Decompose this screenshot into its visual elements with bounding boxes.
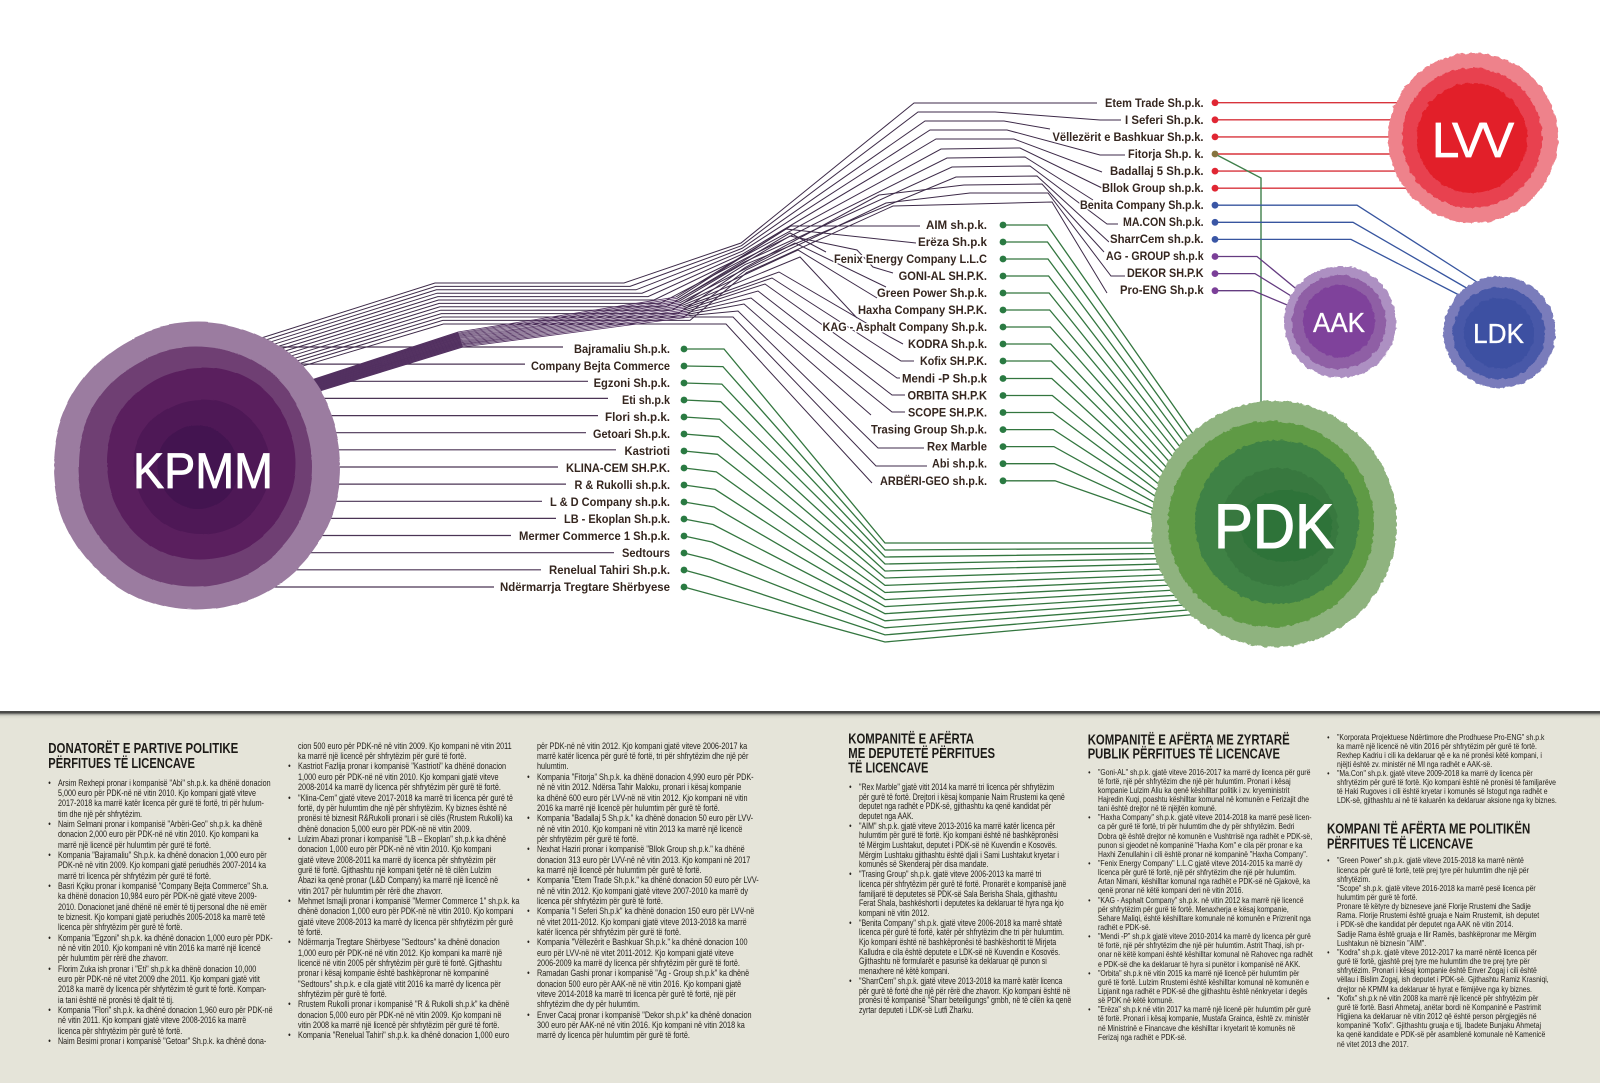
text column: companies linked to politics: gurë të fortë, gjashtë prej tyre me hulumtim dhe tre prej tyre për: [1337, 956, 1530, 966]
text column: companies linked to public officials: onar në këtë kompani është këshilltar komunal në Rahovec nga radhët: [1098, 949, 1313, 959]
heading: donors: [48, 740, 239, 772]
company labels: top group: Etem Trade Sh.p.k.: [1105, 96, 1204, 110]
text column: companies linked to MPs: "Rex Marble" gjatë vitit 2014 ka marrë tri licenca për shfrytëzim: [859, 782, 1054, 792]
company labels: middle group: Abi sh.p.k.: [932, 457, 987, 471]
company labels: left group: Eti sh.p.k: [622, 393, 670, 407]
connectors: middle companies to PDK: [1003, 225, 1194, 516]
text column: companies linked to public officials: punon si gjeodet në kompaninë "Haxha Kom" e cila për pronar e ka: [1098, 840, 1303, 850]
circle: KPMM: [53, 322, 341, 610]
text column: companies linked to public officials: kompanie Lulzim Aliu ka qenë këshilltar politik i zv. kryeministrit: [1098, 785, 1290, 795]
connectors: KPMM to party-linked top companies: [255, 103, 1125, 483]
heading: companies linked to MPs: KOMPANITË E AFËRTA: [848, 730, 974, 748]
company labels: top group: SharrCem sh.p.k.: [1110, 232, 1204, 246]
text column: companies linked to public officials: Hajredin Kuqi, poashtu këshilltar komunal në komunën e Ferizajit dhe: [1098, 794, 1309, 804]
text column: companies linked to public officials: Artan Nimani, këshilltar komunal nga radhët e PDK-së në Gjakovë, ka: [1098, 876, 1310, 886]
text column: donors part 2: Rrustem Rukolli pronar i kompanisë "R & Rukolli sh.p.k" ka dhënë: [298, 999, 509, 1009]
text column: donors part 2: gjatë viteve 2008-2011 ka marrë dy licenca për shfrytëzim për: [298, 855, 496, 865]
company labels: left group: L & D Company sh.p.k.: [550, 495, 670, 509]
circle: LDK: [1444, 276, 1556, 388]
company labels: middle group: Kofix SH.P.K.: [920, 354, 987, 368]
text column: donors part 3: Kompania "I Seferi Sh.p.k" ka dhënë donacion 150 euro për LVV-në: [537, 906, 755, 916]
text column: donors part 1: në vitin 2011. Kjo kompani gjatë viteve 2008-2016 ka marrë: [58, 1015, 246, 1025]
text column: donors part 1: euro për PDK-në në vitet 2009 dhe 2011. Kjo kompani gjatë vitit: [58, 974, 260, 984]
text column: donors part 2: të fortë.: [298, 927, 322, 937]
text column: companies linked to politics: Sadije Rama është gruaja e Ilir Ramës, bashkëpronar me Mërgim: [1337, 929, 1537, 939]
text column: donors part 1: Kompania "Egzoni" sh.p.k. ka dhënë donacion 1,000 euro për PDK-: [58, 933, 273, 943]
text column: companies linked to politics: "Scope" sh.p.k. gjatë viteve 2016-2018 ka marrë pesë licenca për: [1337, 883, 1536, 893]
text column: donors part 2: pronësi të biznesit R&Rukolli pronari i së cilës (Rrustem Rukolli) ka: [298, 813, 512, 823]
company labels: top group: Vëllezërit e Bashkuar Sh.p.k.: [1052, 130, 1204, 144]
company labels: left group: Flori sh.p.k.: [605, 410, 670, 424]
text column: companies linked to MPs: pronësi të kompanisë "Sharr beteiligungs" gmbh, në të cilën ka qenë: [859, 995, 1072, 1005]
text column: donors part 3: shfrytëzim dhe dy për hulumtim.: [537, 999, 640, 1009]
company labels: left group: Egzoni Sh.p.k.: [594, 376, 670, 390]
text column: donors part 1: për hulumtim për rërë dhe zhavorr.: [58, 953, 168, 963]
text column: companies linked to politics: Pronare të këtyre dy bizneseve janë Florije Rrustemi dhe Sadije: [1337, 901, 1531, 911]
text column: donors part 3: për PDK-në në vitin 2012. Kjo kompani gjatë viteve 2006-2017 ka: [537, 741, 748, 751]
text column: donors part 3: për shfrytëzim për gurë të fortë.: [537, 834, 639, 844]
text column: donors part 2: vitin 2017 për hulumtim për rërë dhe zhavorr.: [298, 886, 442, 896]
text column: companies linked to public officials: "Fenix Energy Company" L.L.C gjatë viteve 2014-2015 ka marrë dy: [1098, 858, 1303, 868]
company dots: top group: [1212, 99, 1218, 294]
circle: PDK: PDK: [1214, 492, 1334, 562]
text column: companies linked to public officials: licenca për gurë të fortë, një për shfrytëzim dhe një për hulumtim.: [1098, 867, 1296, 877]
text column: companies linked to politics: "Kodra" sh.p.k. gjatë viteve 2012-2017 ka marrë nëntë licenca për: [1337, 947, 1537, 957]
text column: companies linked to MPs: [849, 782, 1072, 1015]
text column: companies linked to MPs: hulumtim për gurë të fortë. Kjo kompani është në bashkëpronësi: [859, 830, 1058, 840]
text column: donors part 1: Arsim Rexhepi pronar i kompanisë "Abi" sh.p.k. ka dhënë donacion: [58, 778, 271, 788]
heading: companies linked to politics: PËRFITUES TË LICENCAVE: [1327, 835, 1473, 852]
text column: officials continued: LDK-së, gjithashtu ai në të kaluarën ka deklaruar aksione nga ky biznes.: [1337, 795, 1557, 805]
heading: donors: DONATORËT E PARTIVE POLITIKE: [48, 740, 239, 757]
company labels: middle group: Green Power Sh.p.k.: [877, 286, 987, 300]
text column: donors part 3: në vitet 2011-2012. Kjo kompani gjatë viteve 2013-2018 ka marrë: [537, 917, 747, 927]
text column: donors part 2: Ndërmarrja Tregtare Shërbyese "Sedtours" ka dhënë donacion: [298, 937, 499, 947]
company labels: middle group: KODRA Sh.p.k.: [908, 337, 987, 351]
heading: companies linked to MPs: TË LICENCAVE: [848, 760, 929, 776]
text column: companies linked to politics: [1327, 855, 1549, 1049]
text column: donors part 1: donacion 2,000 euro për PDK-në në vitin 2010. Kjo kompani ka: [58, 829, 258, 839]
text column: donors part 1: Kompania "Bajramaliu" Sh.p.k. ka dhënë donacion 1,000 euro për: [58, 850, 267, 860]
text column: donors part 2: 2008-2014 ka marrë dy licenca për shfrytëzim për gurë të fortë.: [298, 782, 501, 792]
circle: PDK: [1151, 401, 1397, 647]
text column: companies linked to public officials: Lipjanit nga radhët e PDK-së dhe gjithashtu është nënkryetar i degës: [1098, 986, 1308, 996]
heading: companies linked to politics: [1327, 820, 1530, 852]
company labels: middle group: AIM sh.p.k.: [926, 218, 987, 232]
company labels: top group: [1052, 96, 1204, 297]
text column: companies linked to public officials: "KAG - Asphalt Company" sh.p.k. në vitin 2012 ka marrë një licencë: [1098, 895, 1304, 905]
text column: companies linked to public officials: qenë pronar në këtë kompani deri në vitin 2016.: [1098, 885, 1244, 895]
heading: donors: PËRFITUES TË LICENCAVE: [48, 755, 195, 772]
heading: companies linked to public officials: KOMPANITË E AFËRTA ME ZYRTARË: [1088, 731, 1290, 748]
text column: companies linked to public officials: Sehare Maliqi, është këshilltare komunale në komunën e Prizrenit nga: [1098, 913, 1311, 923]
text column: donors part 3: ka marrë një licencë për hulumtim për gurë të fortë.: [537, 865, 702, 875]
connectors: companies to LVV: [1215, 103, 1420, 188]
text column: companies linked to public officials: të fortë, një për shfrytëzim dhe një për hulumtim. Astrit Thaqi, ish pr-: [1098, 940, 1305, 950]
text column: companies linked to public officials: Ferizaj nga radhët e PDK-së.: [1098, 1032, 1187, 1042]
company labels: left group: [500, 342, 670, 594]
text column: donors part 1: në në vitin 2010. Kjo kompani në vitin 2016 ka marrë një licencë: [58, 943, 261, 953]
company labels: top group: AG - GROUP sh.p.k: [1106, 249, 1204, 263]
text column: companies linked to public officials: në Ministrinë e Financave dhe këshilltar i kryetarit të komunës në: [1098, 1023, 1296, 1033]
text column: companies linked to MPs: menaxhere në këtë kompani.: [859, 966, 950, 976]
text column: donors part 1: ia tani është në pronësi të djalit të tij.: [58, 995, 174, 1005]
company labels: middle group: Erëza Sh.p.k: [918, 235, 987, 249]
text column: donors part 1: ka dhënë donacion 10,984 euro për PDK-në gjatë viteve 2009-: [58, 891, 257, 901]
company labels: left group: Ndërmarrja Tregtare Shërbyese: [500, 580, 670, 594]
text column: donors part 1: Naim Besimi pronar i kompanisë "Getoar" Sh.p.k. ka dhënë dona-: [58, 1036, 266, 1046]
company labels: middle group: KAG - Asphalt Company Sh.p.k.: [822, 320, 987, 334]
text column: companies linked to public officials: [1088, 767, 1313, 1042]
connectors: band fan-out to middle companies: [676, 226, 927, 466]
text column: companies linked to politics: kompaninë "Kofix". Gjithashtu gruaja e tij, Ibadete Bunjaku Ahmetaj: [1337, 1020, 1541, 1030]
company labels: middle group: SCOPE SH.P.K.: [908, 406, 987, 420]
text column: donors part 3: hulumtim.: [537, 761, 569, 771]
company labels: left group: Sedtours: [622, 546, 670, 560]
text column: donors part 3: donacion 500 euro për AAK-në në vitin 2016. Kjo kompani gjatë: [537, 979, 741, 989]
text column: donors part 1: 5,000 euro për PDK-në në vitin 2010. Kjo kompani gjatë viteve: [58, 788, 256, 798]
text column: officials continued: [1327, 732, 1557, 805]
text column: donors part 3: euro për LVV-në në vitet 2011-2012. Kjo kompani gjatë viteve: [537, 948, 734, 958]
text column: companies linked to public officials: ca për gurë të fortë, tri për hulumtim dhe dy për shfrytëzim. Bedri: [1098, 821, 1295, 831]
text column: companies linked to MPs: licenca për gurë të fortë, katër për shfrytëzim dhe tri për hulumtim.: [859, 927, 1064, 937]
company labels: top group: Benita Company Sh.p.k.: [1080, 198, 1204, 212]
company labels: middle group: Mendi -P Sh.p.k: [902, 372, 987, 386]
text column: donors part 3: 2006-2009 ka marrë dy licenca për shfrytëzim për gurë të fortë.: [537, 958, 740, 968]
text column: donors part 3: në në vitin 2010. Kjo kompani në vitin 2013 ka marrë një licencë: [537, 824, 743, 834]
circle: LVV: LVV: [1432, 114, 1514, 168]
text column: donors part 1: marrë një licencë për hulumtim për gurë të fortë.: [58, 840, 211, 850]
heading: companies linked to public officials: PUBLIK PËRFITUES TË LICENCAVE: [1088, 746, 1280, 763]
text column: donors part 2: gjatë viteve 2008-2013 ka marrë dy licenca për shfrytëzim për gurë: [298, 917, 513, 927]
company labels: left group: KLINA-CEM SH.P.K.: [566, 461, 670, 475]
text column: donors part 2: cion 500 euro për PDK-në në vitin 2009. Kjo kompani në vitin 2011: [298, 741, 511, 751]
text column: companies linked to public officials: të fortë. Pronari i kësaj kompanie, Mustafa Grainca, është zv. ministër: [1098, 1013, 1309, 1023]
text column: donors part 2: Mehmet Ismajli pronar i kompanisë "Mermer Commerce 1" sh.p.k. ka: [298, 896, 519, 906]
text column: donors part 1: 2010. Donacionet janë dhënë në emër të tij personal dhe në emër: [58, 902, 267, 912]
text column: companies linked to MPs: Gjithashtu në formularët e pasurisë ka deklaruar që punon si: [859, 956, 1047, 966]
company labels: top group: Badallaj 5 Sh.p.k.: [1110, 164, 1204, 178]
text column: donors part 1: licenca për shfrytëzim për gurë të fortë.: [58, 1026, 182, 1036]
text column: companies linked to public officials: "Haxha Company" sh.p.k. gjatë viteve 2014-2018 ka marrë pesë licen-: [1098, 812, 1312, 822]
text column: officials continued: njëjti është zv. ministër në MI nga radhët e AAK-së.: [1337, 759, 1492, 769]
text column: donors part 2: 1,000 euro për PDK-në në vitin 2012. Kjo kompani ka marrë një: [298, 948, 502, 958]
text column: companies linked to politics: shfrytëzim. Pronari i kësaj kompanie është Enver Zogaj i cili është: [1337, 965, 1537, 975]
text column: donors part 2: shfrytëzim për gurë të fortë.: [298, 989, 386, 999]
text column: companies linked to MPs: "Trasing Group" sh.p.k. gjatë viteve 2006-2013 ka marrë tri: [859, 869, 1042, 879]
company labels: top group: Pro-ENG Sh.p.k: [1120, 283, 1204, 297]
text column: donors part 2: 1,000 euro për PDK-në në vitin 2010. Kjo kompani gjatë viteve: [298, 772, 498, 782]
company labels: middle group: Fenix Energy Company L.L.C: [834, 252, 987, 266]
text column: donors part 3: Kompania "Vëllezërit e Bashkuar Sh.p.k." ka dhënë donacion 100: [537, 937, 748, 947]
text column: donors part 2: pronar i kësaj kompanie është bashkëpronar në kompaninë: [298, 968, 489, 978]
circle: LVV: [1388, 53, 1558, 223]
company labels: top group: Bllok Group sh.p.k.: [1102, 181, 1204, 195]
text column: companies linked to MPs: familjarë të deputetes së PDK-së Sala Berisha Shala, gjithashtu: [859, 889, 1057, 899]
company labels: left group: Company Bejta Commerce: [531, 359, 670, 373]
panel: explanatory text: [0, 711, 1600, 1083]
circle: LDK: LDK: [1473, 318, 1524, 349]
text column: donors part 2: "Sedtours" sh.p.k. e cila gjatë vitit 2016 ka marrë dy licenca për: [298, 979, 501, 989]
heading: companies linked to public officials: [1088, 731, 1290, 763]
company labels: middle group: Trasing Group Sh.p.k.: [871, 423, 987, 437]
text column: officials continued: "Ma.Con" sh.p.k. gjatë viteve 2009-2018 ka marrë dy licenca për: [1337, 768, 1533, 778]
circle: KPMM: KPMM: [133, 443, 273, 499]
text column: companies linked to public officials: "Goni-AL" sh.p.k. gjatë viteve 2016-2017 ka marrë dy licenca për gurë: [1098, 767, 1311, 777]
text column: companies linked to public officials: Dobra që është drejtor në komunën e Vushtrrisë nga radhët e PDK-së,: [1098, 831, 1312, 841]
text column: companies linked to public officials: "Orbita" sh.p.k në vitin 2015 ka marrë një licencë për hulumtim për: [1098, 968, 1300, 978]
company labels: middle group: ARBËRI-GEO sh.p.k.: [880, 473, 987, 488]
text column: companies linked to public officials: të fortë, një për shfrytëzim dhe një për hulumtim. Pronari i kësaj: [1098, 776, 1291, 786]
company labels: top group: I Seferi Sh.p.k.: [1125, 113, 1204, 127]
text column: companies linked to public officials: së PDK në këtë komunë.: [1098, 995, 1174, 1005]
company labels: left group: R & Rukolli sh.p.k.: [574, 478, 670, 492]
text column: donors part 2: Kastriot Fazlija pronar i kompanisë "Kastrioti" ka dhënë donacion: [298, 761, 506, 771]
company labels: middle group: Rex Marble: [927, 440, 987, 454]
text column: donors part 2: ka marrë një licencë për shfrytëzim për gurë të fortë.: [298, 751, 466, 761]
text column: companies linked to politics: Lushtakun në biznesin "AIM".: [1337, 938, 1426, 948]
text column: donors part 3: Kompania "Badallaj 5 Sh.p.k." ka dhënë donacion 50 euro për LVV-: [537, 813, 753, 823]
text column: donors part 2: vitin 2008 ka marrë një licencë për shfrytëzim për gurë të fortë.: [298, 1020, 499, 1030]
text column: donors part 3: marrë dy licenca për hulumtim për gurë të fortë.: [537, 1030, 690, 1040]
text column: companies linked to politics: "Kofix" sh.p.k në vitin 2008 ka marrë një licencë për shfrytëzim për: [1337, 993, 1539, 1003]
text column: donors part 2: "Klina-Cem" gjatë viteve 2017-2018 ka marrë tri licenca për gurë të: [298, 793, 513, 803]
text column: officials continued: të Haki Rugoves i cili është kryetar i komunës së Istogut nga radhët e: [1337, 786, 1548, 796]
text column: donors part 2: Abazi ka qenë pronar (L&D Company) ka marrë një licencë në: [298, 875, 498, 885]
text column: donors part 3: Kompania "Etem Trade Sh.p.k." ka dhënë donacion 50 euro për LVV-: [537, 875, 759, 885]
text column: companies linked to MPs: kompani në vitin 2012.: [859, 908, 929, 918]
text column: companies linked to MPs: Kalludra e cila është deputete e LDK-së në Kuvendin e Kosovës.: [859, 947, 1060, 957]
text column: donors part 3: [527, 741, 759, 1040]
text column: officials continued: Rexhep Kadriu i cili ka deklaruar që e ka në pronësi këtë kompani, i: [1337, 750, 1542, 760]
text column: companies linked to MPs: Mërgim Lushtaku gjithashtu është djali i Sami Lushtakut kryetar i: [859, 850, 1059, 860]
connectors: companies to LDK: [1215, 205, 1480, 296]
text column: donors part 1: [48, 778, 273, 1046]
text column: donors part 2: fortë, dy për hulumtim dhe një për shfrytëzim. Ky biznes është në: [298, 803, 507, 813]
text column: donors part 1: Naim Selmani pronar i kompanisë "Arbëri-Geo" sh.p.k. ka dhënë: [58, 819, 262, 829]
text column: companies linked to MPs: "SharrCem" sh.p.k. gjatë viteve 2013-2018 ka marrë katër licenca: [859, 976, 1063, 986]
text column: donors part 2: Kompania "Renelual Tahiri" sh.p.k. ka dhënë donacion 1,000 euro: [298, 1030, 509, 1040]
text column: companies linked to MPs: deputet nga AAK.: [859, 811, 914, 821]
text column: companies linked to MPs: komunës së Skenderaj për disa mandate.: [859, 859, 989, 869]
text column: companies linked to public officials: gurë të fortë. Lulzim Rrustemi është këshilltar komunal në komunën e: [1098, 977, 1309, 987]
text column: companies linked to politics: licenca për gurë të fortë, tetë prej tyre për hulumtim dhe një për: [1337, 865, 1529, 875]
company labels: left group: Getoari Sh.p.k.: [593, 427, 670, 441]
text column: donors part 2: dhënë donacion 5,000 euro për PDK-në në vitin 2009.: [298, 824, 471, 834]
text column: donors part 1: marrë tri licenca për shfrytëzim për gurë të fortë.: [58, 871, 211, 881]
connectors: KPMM dense band: [305, 297, 690, 393]
text column: officials continued: ka marrë një licencë në vitin 2016 për shfrytëzim për gurë të fortë.: [1337, 741, 1537, 751]
text column: companies linked to politics: i PDK-së dhe kandidat për deputet nga AAK në vitin 2014.: [1337, 919, 1514, 929]
text column: companies linked to public officials: radhët e PDK-së.: [1098, 922, 1151, 932]
company labels: middle group: Haxha Company SH.P.K.: [858, 303, 987, 317]
company labels: top group: DEKOR SH.P.K: [1127, 266, 1204, 280]
heading: companies linked to MPs: ME DEPUTETË PËRFITUES: [848, 745, 995, 762]
text column: companies linked to MPs: zyrtar deputeti i LDK-së Lutfi Zharku.: [859, 1005, 973, 1015]
connector: Fitorja to PDK: [1215, 154, 1261, 410]
text column: donors part 3: Kompania "Fitorja" Sh.p.k. ka dhënë donacion 4,990 euro për PDK-: [537, 772, 754, 782]
connectors: companies to AAK: [1215, 256, 1300, 307]
connectors: KPMM to donor companies: [250, 347, 616, 587]
text column: companies linked to politics: "Green Power" sh.p.k. gjatë viteve 2015-2018 ka marrë nëntë: [1337, 855, 1524, 865]
text column: donors part 3: licenca për shfrytëzim për gurë të fortë.: [537, 896, 663, 906]
text column: companies linked to public officials: për shfrytëzim për gurë të fortë. Menaxherja e kësaj kompanie,: [1098, 904, 1289, 914]
text column: donors part 1: 2017-2018 ka marrë katër licenca për gurë të fortë, tri për hulum-: [58, 798, 264, 808]
text column: donors part 3: marrë katër licenca për gurë të fortë, tri për shfrytëzim dhe një për: [537, 751, 749, 761]
text column: companies linked to public officials: e PDK-së dhe ka deklaruar të hyra si punëtor i kompanisë në AKK.: [1098, 959, 1301, 969]
company labels: left group: Mermer Commerce 1 Sh.p.k.: [519, 529, 670, 543]
text column: donors part 1: licenca për shfrytëzim për gurë të fortë.: [58, 922, 182, 932]
text column: companies linked to public officials: "Mendi -P" sh.p.k gjatë viteve 2010-2014 ka marrë dy licenca për gurë: [1098, 931, 1311, 941]
text column: donors part 1: tim dhe një për shfrytëzim.: [58, 809, 142, 819]
text column: donors part 2: Lulzim Abazi pronar i kompanisë "LB – Ekoplan" sh.p.k ka dhënë: [298, 834, 506, 844]
text column: donors part 3: Nexhat Haziri pronar i kompanisë "Bllok Group sh.p.k." ka dhënë: [537, 844, 745, 854]
text column: donors part 2: donacion 5,000 euro për PDK-në në vitin 2009. Kjo kompani në: [298, 1010, 501, 1020]
text column: donors part 2: gurë të fortë. Gjithashtu një kompani tjetër në të cilën Lulzim: [298, 865, 491, 875]
company labels: middle group: ORBITA SH.P.K: [908, 388, 987, 402]
text column: donors part 1: Kompania "Flori" sh.p.k. ka dhënë donacion 1,960 euro për PDK-në: [58, 1005, 273, 1015]
text column: companies linked to politics: Higjiena ka deklaruar në vitin 2012 që është person përgjegjës në: [1337, 1011, 1537, 1021]
text column: donors part 1: te biznesit. Kjo kompani gjatë periudhës 2005-2018 ka marrë tetë: [58, 912, 265, 922]
text column: companies linked to MPs: licenca për shfrytëzim për gurë të fortë. Pronarët e kompanisë janë: [859, 879, 1067, 889]
text column: companies linked to public officials: "Erëza" sh.p.k në vitin 2017 ka marrë një licenë për hulumtim për gurë: [1098, 1004, 1311, 1014]
connectors: donors to PDK: [684, 349, 1200, 642]
text column: companies linked to politics: drejtor në KPMM ka deklaruar të hyrat e fëmijëve nga ky biznes.: [1337, 984, 1532, 994]
text column: donors part 3: donacion 313 euro për LVV-në në vitin 2013. Kjo kompani në 2017: [537, 855, 751, 865]
company labels: left group: Bajramaliu Sh.p.k.: [574, 342, 670, 356]
text column: donors part 2: donacion 1,000 euro për PDK-në në vitin 2010. Kjo kompani: [298, 844, 491, 854]
text column: companies linked to politics: shfrytëzim.: [1337, 874, 1370, 884]
text column: companies linked to MPs: "AIM" sh.p.k. gjatë viteve 2013-2016 ka marrë katër licenca për: [859, 821, 1055, 831]
company labels: top group: Fitorja Sh.p. k.: [1128, 147, 1204, 161]
circle: AAK: [1284, 266, 1396, 378]
text column: companies linked to MPs: të Mërgim Lushtakut, deputet i PDK-së në Kuvendin e Kosovës.: [859, 840, 1057, 850]
company labels: middle group: [822, 218, 987, 488]
text column: donors part 2: licencë në vitin 2005 për shfrytëzim për gurë të fortë. Gjithashtu: [298, 958, 501, 968]
text column: donors part 1: PDK-në në vitin 2009. Kjo kompani gjatë periudhës 2007-2014 ka: [58, 860, 266, 870]
heading: companies linked to MPs: [848, 730, 995, 776]
text column: donors part 1: 2018 ka marrë dy licenca për shfyrtëzim të gurit të fortë. Kompan-: [58, 984, 266, 994]
text column: companies linked to MPs: Ferat Shala, bashkëshorti i deputetes ka deklaruar të hyra nga kjo: [859, 898, 1064, 908]
text column: companies linked to MPs: për gurë të fortë. Drejtori i kësaj kompanie Naim Rrustemi ka qenë: [859, 792, 1065, 802]
text column: companies linked to public officials: Haxhi Zenullahin i cili është pronar në kompaninë "Haxha Company".: [1098, 849, 1308, 859]
text column: officials continued: "Korporata Projektuese Ndërtimore dhe Prodhuese Pro-ENG" sh.p.k: [1337, 732, 1545, 742]
text column: donors part 2: [288, 741, 520, 1040]
text column: companies linked to public officials: tani është drejtor në të njëjtën komunë.: [1098, 803, 1217, 813]
text column: donors part 3: ka dhënë 600 euro për LVV-në në vitin 2012. Kjo kompani në vitin: [537, 793, 748, 803]
circle: AAK: AAK: [1313, 307, 1365, 338]
text column: companies linked to politics: ka qenë kandidate e PDK-së për asamblenë komunale në Kamenicë: [1337, 1029, 1546, 1039]
text column: companies linked to politics: gurë të fortë. Basri Ahmetaj, anëtar bordi në Kompaninë e Pastrimit: [1337, 1002, 1541, 1012]
company labels: middle group: GONI-AL SH.P.K.: [899, 269, 987, 283]
text column: donors part 3: në në vitin 2012. Ndërsa Tahir Maloku, pronari i kësaj kompanie: [537, 782, 742, 792]
text column: officials continued: shfrytëzim për gurë të fortë. Kjo kompani është në pronësi të familjarëve: [1337, 777, 1556, 787]
text column: companies linked to MPs: deputet nga radhët e PDK-së, gjithashtu ka qenë kandidat për: [859, 801, 1051, 811]
text column: companies linked to MPs: "Benita Company" sh.p.k. gjatë viteve 2006-2018 ka marrë shtatë: [859, 918, 1062, 928]
text column: donors part 3: në në vitin 2012. Kjo kompani gjatë viteve 2007-2010 ka marrë dy: [537, 886, 748, 896]
text column: donors part 3: 2016 ka marrë një licencë për hulumtim për gurë të fortë.: [537, 803, 720, 813]
text column: donors part 3: Ramadan Gashi pronar i kompanisë "Ag - Group sh.p.k" ka dhënë: [537, 968, 749, 978]
company labels: left group: Renelual Tahiri Sh.p.k.: [549, 563, 670, 577]
text column: companies linked to MPs: Kjo kompani është në bashkëpronësi të bashkëshortit të Mirjeta: [859, 937, 1057, 947]
text column: companies linked to MPs: për gurë të fortë dhe një për rërë dhe zhavorr. Kjo kompani është në: [859, 986, 1071, 996]
company labels: top group: MA.CON Sh.p.k.: [1123, 215, 1204, 229]
text column: donors part 3: katër licenca për shfrytëzim për gurë të fortë.: [537, 927, 681, 937]
company labels: left group: LB - Ekoplan Sh.p.k.: [564, 512, 670, 526]
text column: companies linked to politics: në vitet 2013 dhe 2017.: [1337, 1039, 1409, 1049]
heading: companies linked to politics: KOMPANI TË AFËRTA ME POLITIKËN: [1327, 821, 1530, 838]
text column: companies linked to politics: Rama. Florije Rrustemi është gruaja e Naim Rrustemit, ish deputet: [1337, 910, 1539, 920]
text column: donors part 1: Florim Zuka ish pronar i "Eti" sh.p.k ka dhënë donacion 10,000: [58, 964, 256, 974]
text column: donors part 3: Enver Cacaj pronar i kompanisë "Dekor sh.p.k" ka dhënë donacion: [537, 1010, 752, 1020]
company labels: left group: Kastrioti: [624, 444, 670, 458]
text column: donors part 3: viteve 2014-2018 ka marrë tri licenca për gurë të fortë, një për: [537, 989, 736, 999]
text column: companies linked to politics: vëllau i Bislim Zogaj, ish deputet i PDK-së. Gjithashtu Ramiz Krasniqi,: [1337, 974, 1549, 984]
text column: donors part 2: dhënë donacion 1,000 euro për PDK-në në vitin 2010. Kjo kompani: [298, 906, 513, 916]
text column: donors part 1: Basri Kçiku pronar i kompanisë "Company Bejta Commerce" Sh.a.: [58, 881, 269, 891]
company dots: middle and left groups: [681, 222, 1006, 590]
text column: companies linked to politics: hulumtim për gurë të fortë.: [1337, 892, 1418, 902]
text column: donors part 3: 300 euro për AAK-në në vitin 2016. Kjo kompani në vitin 2018 ka: [537, 1020, 745, 1030]
